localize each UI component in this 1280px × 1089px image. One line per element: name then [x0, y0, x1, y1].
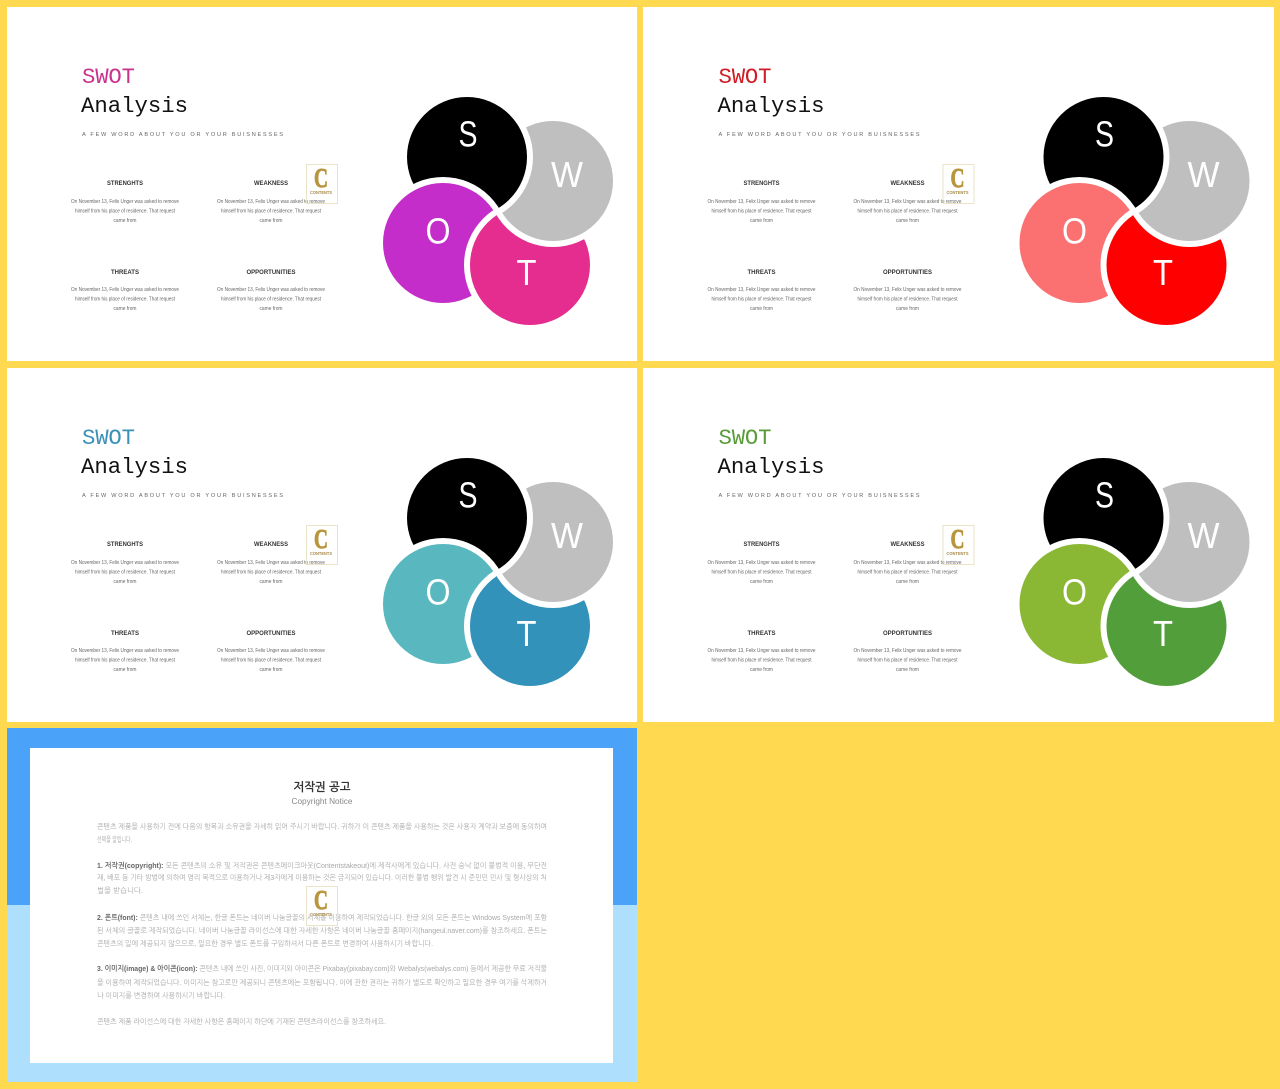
title: SWOT Analysis: [718, 425, 824, 480]
heading: copyright notice: [292, 780, 353, 806]
icon: watermark logo: CONTENTS: [310, 190, 332, 195]
text block: font clause: 된 서체의 글꼴로 제작되었습니다. 네이버 나눔글꼴 라이선스에 대한 자세한 사항은 네이버 나눔글꼴 홈페이지(hangeul.naver.com)를 참조하세요. 폰트는: [97, 926, 547, 935]
text block: copyright clause: 벌을 받습니다.: [97, 886, 143, 895]
icon: watermark logo: CONTENTS: [946, 190, 968, 195]
text block: introduction: 콘텐츠 제품을 사용하기 전에 다음의 항목과 소유권을 자세히 읽어 주시기 바랍니다. 귀하가 이 콘텐츠 제품을 사용하는 것은 사용자 계약과 보증에 동의하여: [97, 822, 547, 831]
text blocks: four SWOT descriptions: came from: [896, 579, 919, 585]
icon: watermark logo: CONTENTS: [310, 912, 332, 917]
text blocks: four SWOT descriptions: came from: [114, 218, 136, 224]
icon: watermark logo: C: [314, 885, 328, 915]
text blocks: four SWOT descriptions: himself from his place of residence. That request: [221, 570, 322, 576]
diagram: SWOT interlocking circles: [1020, 97, 1250, 325]
text blocks: four SWOT descriptions: himself from his place of residence. That request: [712, 296, 812, 302]
panel: blue SWOT slide: [7, 368, 637, 722]
text blocks: four SWOT descriptions: came from: [260, 579, 282, 585]
text blocks: four SWOT descriptions: On November 13, Felix Unger was asked to remove: [217, 648, 325, 654]
title: SWOT Analysis: Analysis: [81, 454, 188, 480]
text blocks: four SWOT descriptions: On November 13, Felix Unger was asked to remove: [708, 199, 816, 205]
text blocks: four SWOT descriptions: came from: [114, 579, 136, 585]
text blocks: four SWOT descriptions: THREATS: [111, 631, 139, 637]
text block: font clause: 콘텐츠의 일에 제공되지 않으므로, 필요한 경우 별도 폰트를 구입하셔서 다른 폰트로 변경하여 사용하시기 바랍니다.: [97, 939, 433, 948]
diagram: SWOT interlocking circles: T: [1153, 252, 1173, 293]
text block: image and icon clause: 을 이용하여 제작되었습니다. 이미지는 참고로만 제공되니 콘텐츠에는 포함됩니다. 이에 관한 권리는 귀하가 별도로 확인하고 필요한 경우 여기를 삭제하거: [97, 978, 547, 987]
text blocks: four SWOT descriptions: himself from his place of residence. That request: [712, 658, 812, 664]
text blocks: four SWOT descriptions: came from: [750, 667, 773, 673]
text blocks: four SWOT descriptions: On November 13, Felix Unger was asked to remove: [708, 287, 816, 293]
text blocks: four SWOT descriptions: came from: [896, 306, 919, 312]
icon: watermark logo: [943, 524, 974, 564]
text block: font clause: 2. 폰트(font): 콘텐츠 내에 쓰인 서체는, 한글 폰트는 네이버 나눔글꼴의 서체를 이용하여 제작되었습니다. 한글 외의 모든 폰트는 Windows System에 포함: [97, 913, 547, 922]
text blocks: four SWOT descriptions: himself from his place of residence. That request: [221, 296, 322, 302]
panel: red SWOT slide: [643, 7, 1274, 361]
title: SWOT Analysis: SWOT: [82, 425, 135, 451]
text blocks: four SWOT descriptions: OPPORTUNITIES: [883, 270, 932, 276]
heading: copyright notice: Copyright Notice: [292, 796, 353, 806]
text blocks: four SWOT descriptions: THREATS: [111, 270, 139, 276]
title: SWOT Analysis: Analysis: [718, 454, 824, 480]
title: SWOT Analysis: [81, 64, 188, 119]
icon: watermark logo: CONTENTS: [946, 551, 968, 556]
text blocks: four SWOT descriptions: himself from his place of residence. That request: [858, 658, 958, 664]
icon: watermark logo: C: [314, 524, 328, 554]
icon: watermark logo: C: [950, 524, 964, 554]
title: SWOT Analysis: Analysis: [718, 93, 824, 119]
diagram: SWOT interlocking circles: S: [458, 474, 478, 516]
text blocks: four SWOT descriptions: himself from his place of residence. That request: [858, 296, 958, 302]
text blocks: four SWOT descriptions: WEAKNESS: [890, 181, 924, 187]
text blocks: four SWOT descriptions: STRENGHTS: [107, 542, 143, 548]
icon: watermark logo: [306, 163, 338, 204]
diagram: SWOT interlocking circles: O: [1062, 572, 1087, 612]
text blocks: four SWOT descriptions: himself from his place of residence. That request: [712, 208, 812, 214]
text block: introduction: 선택을 알립니다.: [97, 835, 132, 844]
text blocks: four SWOT descriptions: himself from his place of residence. That request: [75, 296, 176, 302]
tagline: A FEW WORD ABOUT YOU OR YOUR BUISNESSES: [718, 132, 920, 138]
heading: copyright notice: 저작권 공고: [294, 780, 351, 794]
diagram: SWOT interlocking circles: O: [1062, 210, 1087, 252]
diagram: SWOT interlocking circles: [383, 97, 613, 325]
diagram: SWOT interlocking circles: S: [1095, 114, 1114, 154]
text blocks: four SWOT descriptions: himself from his place of residence. That request: [712, 570, 812, 576]
text blocks: four SWOT descriptions: OPPORTUNITIES: [246, 270, 296, 276]
text blocks: four SWOT descriptions: On November 13, Felix Unger was asked to remove: [854, 287, 962, 293]
diagram: SWOT interlocking circles: W: [1188, 154, 1220, 195]
text blocks: four SWOT descriptions: On November 13, Felix Unger was asked to remove: [854, 560, 962, 566]
text blocks: four SWOT descriptions: came from: [260, 306, 282, 312]
tagline: A FEW WORD ABOUT YOU OR YOUR BUISNESSES: [718, 493, 920, 499]
diagram: SWOT interlocking circles: W: [1188, 515, 1220, 556]
text block: font clause: [97, 913, 547, 948]
diagram: SWOT interlocking circles: S: [1095, 474, 1114, 516]
text blocks: four SWOT descriptions: came from: [260, 667, 282, 673]
icon: watermark logo: [943, 163, 974, 204]
text blocks: four SWOT descriptions: came from: [260, 218, 282, 224]
title: SWOT Analysis: SWOT: [718, 64, 772, 90]
text blocks: four SWOT descriptions: himself from his place of residence. That request: [75, 208, 176, 214]
text blocks: four SWOT descriptions: On November 13, Felix Unger was asked to remove: [71, 287, 179, 293]
diagram: SWOT interlocking circles: T: [516, 252, 536, 293]
text blocks: four SWOT descriptions: STRENGHTS: [744, 542, 780, 548]
text block: image and icon clause: [97, 964, 547, 1000]
text blocks: four SWOT descriptions: came from: [114, 306, 136, 312]
panel: magenta SWOT slide: [7, 7, 637, 361]
text blocks: four SWOT descriptions: STRENGHTS: [744, 181, 780, 187]
text blocks: four SWOT descriptions: [708, 181, 962, 312]
title: SWOT Analysis: SWOT: [82, 64, 135, 90]
text blocks: four SWOT descriptions: On November 13, Felix Unger was asked to remove: [708, 648, 816, 654]
text blocks: four SWOT descriptions: On November 13, Felix Unger was asked to remove: [71, 199, 179, 205]
text blocks: four SWOT descriptions: On November 13, Felix Unger was asked to remove: [71, 560, 179, 566]
title: SWOT Analysis: [718, 64, 824, 119]
text blocks: four SWOT descriptions: On November 13, Felix Unger was asked to remove: [217, 560, 325, 566]
diagram: SWOT interlocking circles: [1020, 458, 1250, 686]
text blocks: four SWOT descriptions: On November 13, Felix Unger was asked to remove: [854, 199, 962, 205]
text blocks: four SWOT descriptions: On November 13, Felix Unger was asked to remove: [217, 287, 325, 293]
text blocks: four SWOT descriptions: On November 13, Felix Unger was asked to remove: [708, 560, 816, 566]
text blocks: four SWOT descriptions: [71, 542, 325, 673]
diagram: SWOT interlocking circles: O: [426, 572, 450, 612]
text blocks: four SWOT descriptions: OPPORTUNITIES: [246, 631, 296, 637]
text blocks: four SWOT descriptions: WEAKNESS: [890, 542, 924, 548]
text blocks: four SWOT descriptions: came from: [896, 218, 919, 224]
icon: watermark logo: C: [950, 163, 964, 193]
text blocks: four SWOT descriptions: [708, 542, 962, 673]
diagram: SWOT interlocking circles: T: [1153, 613, 1173, 654]
title: SWOT Analysis: [81, 425, 188, 480]
text block: introduction: [97, 822, 547, 844]
text blocks: four SWOT descriptions: himself from his place of residence. That request: [858, 570, 958, 576]
icon: watermark logo: C: [314, 163, 328, 193]
text block: license reference: 콘텐츠 제품 라이선스에 대한 자세한 사항은 홈페이지 하단에 기재된 콘텐츠라이선스를 참조하세요.: [97, 1017, 386, 1026]
text blocks: four SWOT descriptions: STRENGHTS: [107, 181, 143, 187]
text blocks: four SWOT descriptions: WEAKNESS: [254, 542, 288, 548]
text block: image and icon clause: 나 이미지를 변경하여 사용하시기 바랍니다.: [97, 991, 225, 1000]
text block: copyright clause: 재, 배포 등 기타 방법에 의하여 영리 목적으로 이용하거나 제3자에게 이용하는 것은 금지되어 있습니다. 이러한 불법 행위 발견 시 준민민 민사 및 형사상의 처: [97, 873, 547, 882]
text blocks: four SWOT descriptions: came from: [750, 218, 773, 224]
title: SWOT Analysis: SWOT: [718, 425, 772, 451]
diagram: SWOT interlocking circles: W: [551, 515, 583, 556]
text blocks: four SWOT descriptions: came from: [750, 306, 773, 312]
diagram: SWOT interlocking circles: T: [516, 613, 536, 654]
tagline: A FEW WORD ABOUT YOU OR YOUR BUISNESSES: [82, 493, 283, 499]
text block: image and icon clause: 3. 이미지(image) & 아이콘(icon): 콘텐츠 내에 쓰인 사진, 이미지와 아이콘은 Pixabay(pixabay.com)와 Webalys(webalys.com) 등에서 제공한 무료 저작물: [97, 964, 547, 973]
text blocks: four SWOT descriptions: THREATS: [748, 631, 776, 637]
text blocks: four SWOT descriptions: On November 13, Felix Unger was asked to remove: [854, 648, 962, 654]
text blocks: four SWOT descriptions: On November 13, Felix Unger was asked to remove: [71, 648, 179, 654]
text block: copyright clause: 1. 저작권(copyright): 모든 콘텐츠의 소유 및 저작권은 콘텐츠메이크아웃(Contentstakeout)에 제작사에게 있습니다. 사전 승낙 없이 불법적 이용, 무단전: [97, 861, 547, 870]
panel: copyright notice: [7, 728, 637, 1082]
text blocks: four SWOT descriptions: On November 13, Felix Unger was asked to remove: [217, 199, 325, 205]
title: SWOT Analysis: Analysis: [81, 93, 188, 119]
text blocks: four SWOT descriptions: THREATS: [748, 270, 776, 276]
text blocks: four SWOT descriptions: OPPORTUNITIES: [883, 631, 932, 637]
text blocks: four SWOT descriptions: came from: [114, 667, 136, 673]
icon: watermark logo: CONTENTS: [310, 551, 332, 556]
text blocks: four SWOT descriptions: himself from his place of residence. That request: [75, 658, 176, 664]
text blocks: four SWOT descriptions: himself from his place of residence. That request: [75, 570, 176, 576]
diagram: SWOT interlocking circles: S: [458, 114, 478, 154]
text blocks: four SWOT descriptions: WEAKNESS: [254, 181, 288, 187]
tagline: A FEW WORD ABOUT YOU OR YOUR BUISNESSES: [82, 132, 283, 138]
text blocks: four SWOT descriptions: came from: [750, 579, 773, 585]
icon: watermark logo: [306, 524, 338, 564]
icon: watermark logo: [306, 885, 338, 926]
text blocks: four SWOT descriptions: himself from his place of residence. That request: [221, 208, 322, 214]
diagram: SWOT interlocking circles: O: [426, 210, 450, 252]
diagram: SWOT interlocking circles: [383, 458, 613, 686]
text blocks: four SWOT descriptions: [71, 181, 325, 312]
diagram: SWOT interlocking circles: W: [551, 154, 583, 195]
text blocks: four SWOT descriptions: came from: [896, 667, 919, 673]
text blocks: four SWOT descriptions: himself from his place of residence. That request: [858, 208, 958, 214]
text blocks: four SWOT descriptions: himself from his place of residence. That request: [221, 658, 322, 664]
panel: green SWOT slide: [643, 368, 1274, 722]
text block: copyright clause: [97, 861, 547, 895]
